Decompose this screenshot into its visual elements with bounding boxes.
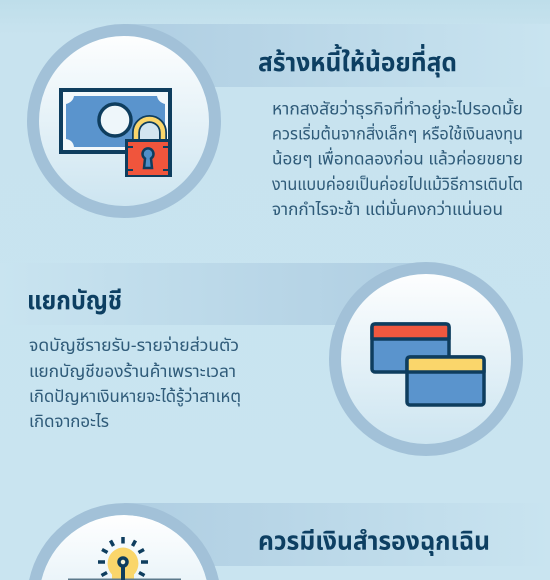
heading: ควรมีเงินสำรองฉุกเฉิน — [258, 526, 490, 556]
body text: แยกบัญชีของร้านค้าเพราะเวลา — [29, 361, 236, 381]
heading: สร้างหนี้ให้น้อยที่สุด — [258, 44, 457, 78]
heading band — [124, 503, 550, 566]
body text: หากสงสัยว่าธุรกิจที่ทำอยู่จะไปรอดมั้ย — [272, 96, 523, 120]
body text: จดบัญชีรายรับ-รายจ่ายส่วนตัว — [29, 336, 239, 355]
panel: emergency fund — [29, 503, 550, 580]
heading: แยกบัญชี — [27, 285, 122, 315]
body text — [29, 336, 241, 431]
heading band — [0, 263, 426, 325]
icon: banknote with padlock — [61, 90, 172, 177]
heading band — [124, 24, 550, 87]
icon: two cards — [372, 324, 484, 405]
panel: minimise debt — [33, 24, 550, 219]
panel: separate accounts — [0, 263, 517, 450]
body text: ควรเริ่มต้นจากสิ่งเล็กๆ หรือใช้เงินลงทุน — [272, 123, 523, 144]
body text: เกิดจากอะไร — [29, 412, 109, 431]
body text: เกิดปัญหาเงินหายจะได้รู้ว่าสาเหตุ — [29, 386, 241, 408]
body text: งานแบบค่อยเป็นค่อยไปแม้วิธีการเติบโต — [272, 174, 523, 194]
icon: light bulb — [68, 537, 181, 580]
body text — [272, 96, 523, 219]
body text: จากกำไรจะช้า แต่มั่นคงกว่าแน่นอน — [272, 198, 503, 219]
icon circle — [335, 268, 517, 450]
icon circle — [33, 30, 215, 212]
icon circle — [29, 503, 219, 580]
body text: น้อยๆ เพื่อทดลองก่อน แล้วค่อยขยาย — [272, 146, 523, 168]
